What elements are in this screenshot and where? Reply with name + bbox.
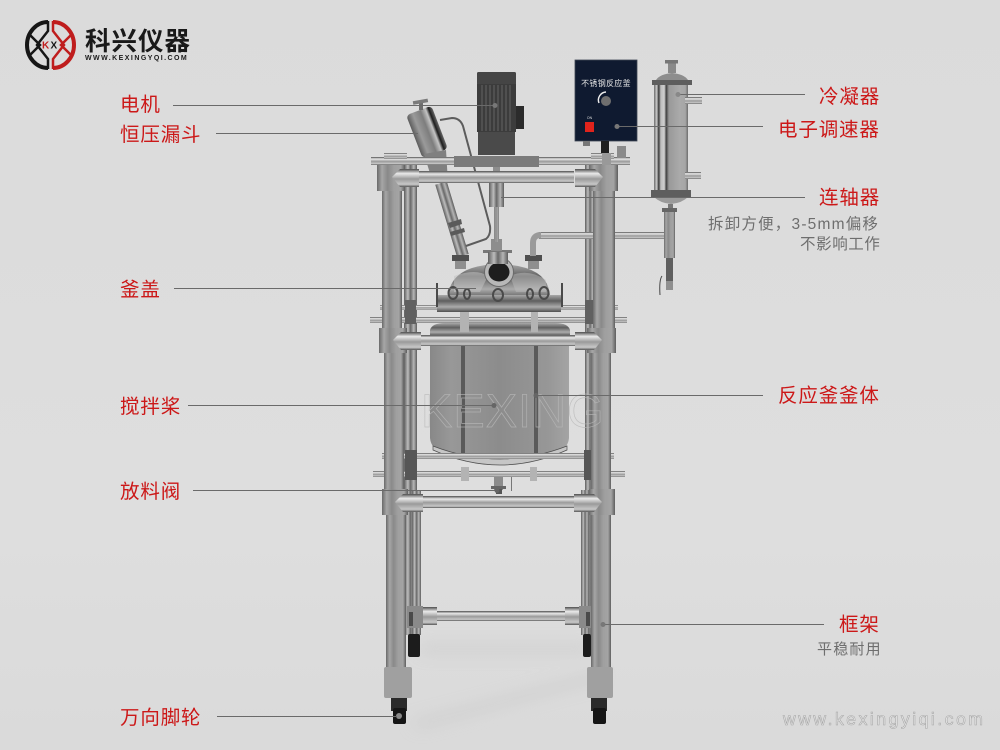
reactor machine (370, 60, 702, 724)
lid sight glass (484, 258, 514, 286)
vessel leader (534, 393, 763, 398)
website watermark: www.kexingyiqi.com (782, 709, 985, 729)
callout: coupling (501, 187, 881, 253)
left leg sleeve (384, 667, 412, 698)
right leg sleeve (587, 667, 613, 698)
vessel seams (461, 345, 538, 457)
vessel body (430, 345, 569, 465)
condenser (651, 60, 702, 295)
controller knob (601, 96, 611, 106)
callout: vessel body (534, 385, 880, 407)
reaction vessel (430, 323, 570, 494)
top plate (371, 153, 630, 167)
controller callout label: 电子调速器 (778, 119, 880, 141)
callout: frame (600, 614, 882, 658)
callout: motor (120, 94, 498, 116)
motor label: 电机 (120, 94, 161, 116)
funnel label: 恒压漏斗 (120, 124, 201, 146)
connecting pipe (533, 232, 664, 256)
casters label: 万向脚轮 (120, 707, 201, 729)
vessel flange (430, 323, 570, 336)
logo: X (50, 40, 58, 52)
funnel knob (419, 101, 423, 110)
right front caster (591, 698, 607, 724)
stir shaft and coupling (489, 165, 504, 242)
discharge valve (491, 477, 512, 494)
casters leader (217, 716, 397, 718)
electronic speed controller (575, 60, 637, 165)
valve label: 放料阀 (120, 481, 181, 503)
lower frame cross bar (382, 489, 615, 515)
motor leader (173, 103, 498, 108)
condenser ports (685, 97, 702, 104)
vessel label: 反应釜釜体 (778, 385, 880, 407)
coupling label: 连轴器 (819, 187, 880, 209)
condenser outlet (668, 204, 673, 209)
lower left column (386, 512, 406, 668)
lid side ports (452, 255, 469, 261)
logo initials: K (42, 40, 50, 52)
callout: discharge valve (120, 481, 500, 503)
frame rear columns (404, 165, 595, 635)
controller leader (614, 124, 763, 129)
condenser top fitting (668, 63, 676, 73)
controller label: 不锈钢反应釜 (581, 78, 631, 88)
vessel bottom rim (433, 446, 567, 465)
coupling note line 2: 不影响工作 (800, 235, 881, 253)
valve leader (193, 488, 500, 493)
callout: speed controller (614, 119, 880, 141)
constant pressure funnel (406, 99, 490, 261)
middle cross bar (379, 328, 616, 353)
funnel return tube (440, 118, 490, 247)
frame leader (600, 622, 824, 627)
logo name: 科兴仪器 (85, 28, 191, 56)
floor shadows (410, 645, 600, 728)
coupling leader (501, 196, 805, 198)
funnel tank (406, 106, 448, 158)
mid right column (591, 352, 611, 492)
logo (27, 21, 191, 69)
watermark KEXING: KEXING (421, 384, 605, 437)
condenser label: 冷凝器 (819, 86, 880, 108)
lower cross bar (407, 606, 591, 628)
lid leader (174, 288, 476, 290)
frame note: 平稳耐用 (817, 641, 882, 658)
motor (477, 72, 524, 155)
left front caster (391, 698, 407, 724)
coupling note line 1: 拆卸方便，3-5mm偏移 (708, 215, 879, 233)
front left column (382, 190, 402, 330)
callout: condenser (676, 86, 880, 108)
logo mark (27, 21, 74, 69)
controller cable and glands (583, 141, 626, 165)
lower right column (591, 512, 611, 668)
controller switch (585, 122, 594, 132)
callout: stirring paddle (120, 396, 496, 418)
lid center port (483, 250, 512, 253)
funnel leader (216, 132, 418, 134)
mid left column (384, 352, 404, 492)
lid label: 釜盖 (120, 279, 161, 301)
frame label: 框架 (839, 614, 880, 636)
controller switch text: ON (587, 116, 593, 120)
paddle label: 搅拌桨 (120, 396, 181, 418)
lid clamps (437, 283, 562, 307)
reactor lid (437, 239, 562, 312)
top cross bar (377, 165, 618, 191)
front right column (593, 190, 615, 330)
funnel stem (435, 181, 469, 257)
upper horizontal rods (370, 300, 627, 481)
rear casters (408, 634, 591, 657)
logo url: WWW.KEXINGYQI.COM (85, 55, 188, 62)
paddle leader (188, 403, 496, 408)
condenser leader (676, 92, 805, 97)
